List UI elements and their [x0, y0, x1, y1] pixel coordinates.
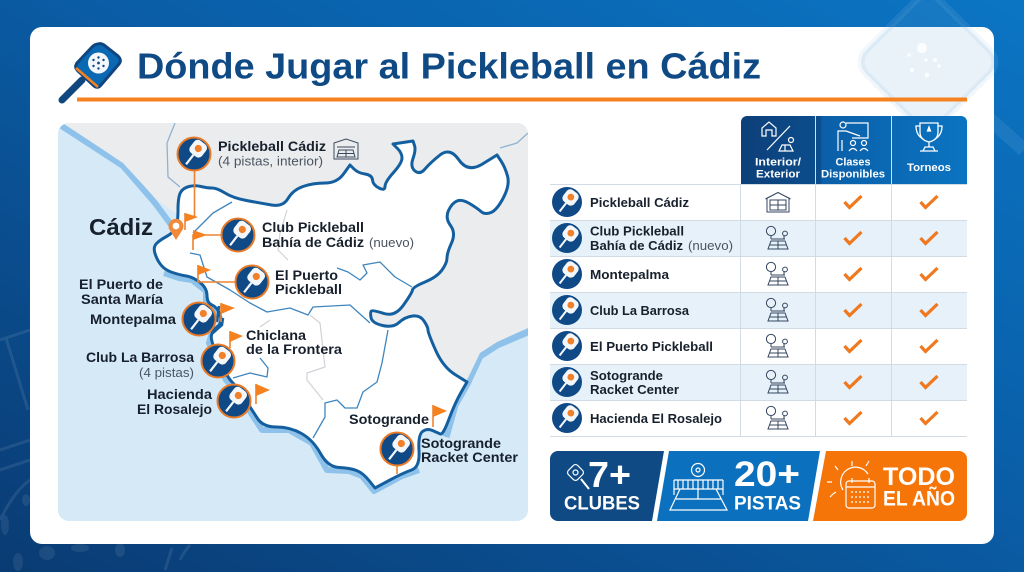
- row names: Pickleball Cádiz: [590, 195, 689, 210]
- row names: Sotogrande: [590, 368, 663, 383]
- title: Dónde Jugar al Pickleball en Cádiz: [137, 46, 761, 86]
- stat: todo el año: [813, 451, 967, 521]
- checkmarks: [844, 196, 938, 424]
- row names: Montepalma: [590, 267, 670, 282]
- map labels: de la Frontera: [246, 342, 343, 357]
- row names: [590, 195, 733, 426]
- map labels: Club Pickleball: [262, 220, 364, 235]
- map labels: (4 pistas, interior): [218, 154, 323, 168]
- row names: Hacienda El Rosalejo: [590, 411, 722, 426]
- map labels: Montepalma: [90, 312, 177, 327]
- stat: todo el año: TODO: [883, 463, 955, 491]
- map labels: Hacienda: [147, 387, 213, 402]
- map labels: [79, 139, 519, 465]
- stat: 7+ clubes: 7+: [588, 454, 631, 495]
- map labels: Pickleball Cádiz: [218, 139, 326, 154]
- map labels: El Rosalejo: [137, 402, 212, 417]
- connector lines: [185, 170, 433, 474]
- table header: Disponibles: [821, 168, 885, 180]
- icon: paddle: [566, 463, 589, 489]
- watermark on background: [854, 0, 1002, 136]
- table header: Exterior: [756, 168, 801, 180]
- icon: indoor outdoor: [762, 122, 794, 151]
- map labels: Cádiz: [89, 214, 153, 240]
- stat: 7+ clubes: [550, 451, 664, 521]
- icon: pickleball paddle logo: [62, 44, 120, 100]
- row names: Bahía de Cádiz: [590, 238, 683, 253]
- map labels: Santa María: [81, 292, 164, 307]
- stat: 20+ pistas: 20+: [734, 455, 800, 494]
- map labels: (4 pistas): [139, 365, 194, 380]
- map labels: Bahía de Cádiz: [262, 235, 364, 250]
- watermark: paddle on card: [854, 0, 1002, 136]
- map labels: El Puerto: [275, 268, 338, 283]
- stat: 20+ pistas: [657, 451, 820, 521]
- stat: 20+ pistas: PISTAS: [734, 492, 801, 514]
- coast shadow: [60, 125, 530, 491]
- table header: Torneos: [907, 162, 951, 174]
- map labels: Club La Barrosa: [86, 350, 195, 365]
- icon: indoor court on map: [334, 139, 358, 159]
- row names: (nuevo): [688, 239, 733, 253]
- icon: indoor court: [766, 192, 790, 212]
- row names: El Puerto Pickleball: [590, 339, 713, 354]
- map labels: Pickleball: [275, 282, 342, 297]
- map labels: (nuevo): [369, 235, 414, 250]
- region: province of Cádiz: [154, 141, 508, 488]
- icon: sun and calendar: [827, 461, 875, 508]
- row names: Club La Barrosa: [590, 303, 690, 318]
- land: neighbouring grey: [63, 123, 528, 400]
- icon: classes: [838, 122, 868, 151]
- table header: Clases: [836, 156, 870, 168]
- row icons: [552, 187, 582, 433]
- icon: court: [670, 464, 727, 510]
- map labels: Racket Center: [421, 450, 519, 465]
- map labels: El Puerto de: [79, 277, 164, 292]
- title underline: [77, 98, 967, 102]
- internal borders: [167, 123, 528, 438]
- row names: Racket Center: [590, 382, 679, 397]
- map labels: Sotogrande: [421, 436, 502, 451]
- table header: [741, 116, 967, 184]
- map labels: Sotogrande: [349, 412, 430, 427]
- stat: 7+ clubes: CLUBES: [564, 492, 640, 514]
- map labels: Chiclana: [246, 328, 307, 343]
- row names: Club Pickleball: [590, 224, 684, 238]
- map flags: [185, 213, 447, 417]
- table rows: [550, 184, 967, 437]
- stat: todo el año: EL AÑO: [883, 488, 955, 510]
- panel: map: [58, 123, 530, 521]
- pin: Cádiz: [168, 219, 184, 240]
- table header: Interior/: [755, 156, 801, 168]
- icon: trophy: [916, 123, 942, 151]
- map markers: [178, 138, 414, 466]
- outdoor court icons: [766, 226, 788, 429]
